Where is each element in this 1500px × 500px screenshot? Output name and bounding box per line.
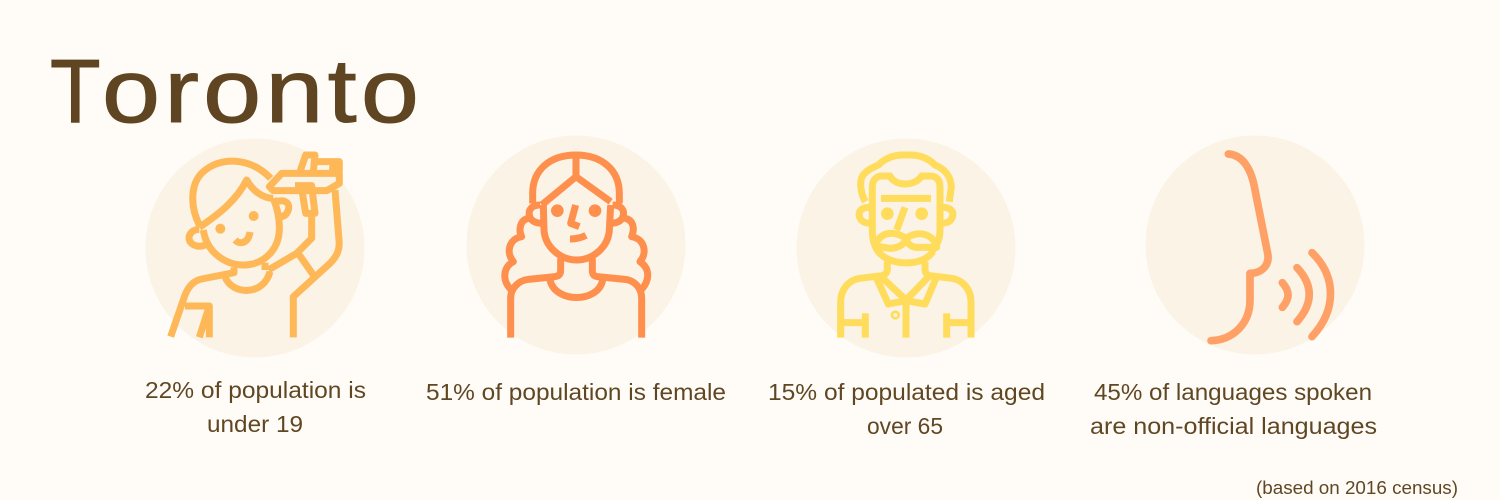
circle background: languages (1146, 136, 1364, 354)
caption: languages (1090, 379, 1377, 439)
circle background: youth (146, 138, 364, 358)
panel: female statistic (426, 136, 726, 405)
icon: child holding toy plane (171, 155, 339, 337)
caption: youth (145, 377, 366, 437)
title: T (50, 42, 101, 142)
icon: older man with moustache (841, 155, 971, 338)
icon: woman with curly hair (505, 155, 648, 338)
circle background: female (466, 136, 686, 354)
caption: seniors: 15% of populated is aged (768, 379, 1045, 405)
caption: female: 51% of population is female (426, 379, 726, 405)
panel: youth statistic (145, 138, 366, 437)
caption: youth: under 19 (207, 411, 303, 437)
panel: languages statistic (1090, 136, 1377, 439)
caption: youth: 22% of population is (145, 377, 366, 403)
caption: languages: 45% of languages spoken (1094, 379, 1372, 405)
title: oronto (102, 42, 423, 142)
caption: languages: are non-official languages (1090, 413, 1377, 439)
circle background: seniors (796, 138, 1016, 358)
caption: seniors (768, 379, 1045, 439)
panel: seniors statistic (768, 138, 1045, 439)
caption: seniors: over 65 (867, 413, 943, 439)
source note: (based on 2016 census) (1256, 478, 1458, 498)
icon: face profile speaking (1211, 154, 1330, 341)
